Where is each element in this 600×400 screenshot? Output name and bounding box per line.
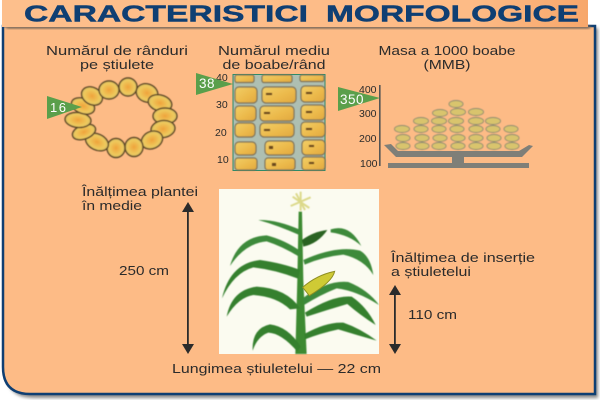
marker: 16 [47,96,82,119]
axis labels: 40 [216,72,228,84]
label: plant height: în medie [81,198,142,213]
axis labels: 30 [216,99,228,111]
section: kernels per row [196,43,330,170]
label: plant height: Înălțimea plantei [81,184,198,199]
marker: 16: 16 [50,100,67,115]
section: rows per ear [46,43,188,158]
heading line 2: (MMB) [424,57,470,72]
axis labels: 100 [360,158,378,170]
heading bar [2,0,590,29]
marker: 38: 38 [199,76,215,91]
heading: kernels per row: Numărul mediu [218,43,330,58]
axis labels: 20 [215,127,227,139]
chart: kernel grid [233,74,325,170]
axis labels: 10 [217,154,229,166]
ear [303,271,335,296]
kernels [394,100,519,150]
section: thousand kernel mass [338,43,533,170]
title: MORFOLOGICE [326,0,579,26]
axis labels [359,84,381,170]
label: ear insertion height: Înălțimea de inserție [390,250,535,265]
label: ear length: Lungimea știuletelui — 22 cm [172,361,381,376]
stalk [295,212,307,354]
value: 110 cm: 110 cm [408,307,457,322]
label: plant height [81,184,198,213]
scale [384,144,533,168]
tassel [291,192,311,211]
kernel marks [264,92,314,166]
heading line 2: pe știulete [80,57,154,72]
arrow: ear insertion height [389,285,401,354]
illustration: corn plant [219,189,379,354]
label: ear insertion height: a știuletelui [391,264,471,279]
value: 250 cm: 250 cm [119,263,169,278]
heading line 2: de boabe/rând [222,57,326,72]
title [24,0,579,26]
arrow: plant height [182,202,194,354]
heading: thousand kernel mass: Masa a 1000 boabe [378,43,516,58]
icon: scale with kernels [384,100,533,168]
axis labels [215,72,229,166]
marker: 350 [338,87,380,111]
marker: 350: 350 [340,92,364,107]
axis labels: 200 [359,133,377,145]
heading: rows per ear: Numărul de rânduri [46,43,188,58]
title: CARACTERISTICI [24,0,308,26]
axis labels: 400 [359,84,377,96]
label: ear insertion height [390,250,535,279]
icon: ring of corn kernels [64,78,177,158]
axis labels: 300 [359,108,377,120]
leaves [258,220,301,235]
